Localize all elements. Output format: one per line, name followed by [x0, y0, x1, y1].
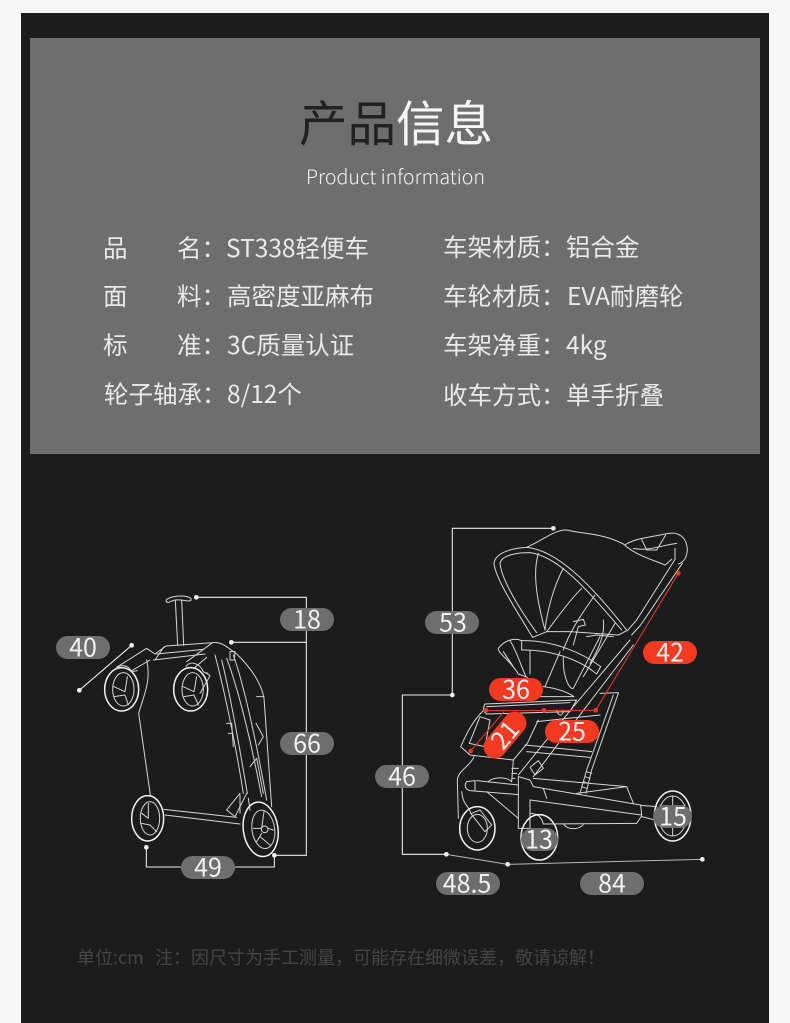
footnote: 单位:cm: [77, 944, 144, 970]
spec: bearings: 轮子轴承：: [104, 376, 226, 411]
label: 15: 15: [659, 798, 687, 834]
label: 66: 66: [293, 724, 321, 760]
icon: folded stroller line art: [105, 596, 282, 859]
subtitle: Product information: [306, 161, 485, 190]
label: 18: [280, 600, 334, 636]
white dimension lines: [402, 526, 705, 867]
spec: fabric: 面: [103, 278, 128, 313]
spec: name: 名：: [177, 230, 226, 265]
label: 21: 21: [482, 712, 527, 757]
label: 84: 84: [598, 864, 626, 900]
spec: folding method: 单手折叠: [566, 377, 664, 412]
spec: fabric: 高密度亚麻布: [227, 278, 374, 313]
spec: wheel material: 车轮材质：: [443, 278, 566, 313]
label: 42: [643, 634, 697, 670]
red dimension lines: [468, 571, 681, 753]
label: 18: 18: [293, 600, 321, 636]
spec: frame material: 车架材质：: [443, 229, 566, 264]
label: 53: 53: [439, 604, 467, 640]
label: 84: [580, 864, 644, 900]
dimension lines: [77, 595, 306, 867]
spec: wheel material: EVA耐磨轮: [567, 278, 684, 313]
label: 49: 49: [194, 848, 222, 884]
spec: standard: 标: [103, 327, 128, 362]
label: 48.5: 48.5: [443, 864, 491, 900]
label: 21: [473, 702, 535, 767]
title: 产品信息: [299, 85, 493, 155]
label: 36: [489, 670, 543, 706]
spec: name: ST338轻便车: [226, 230, 369, 265]
spec: frame weight: 4kg: [566, 327, 607, 362]
spec: frame material: 铝合金: [566, 229, 640, 264]
panel: product information: [30, 38, 760, 454]
label: 40: [56, 628, 110, 664]
spec: standard: 3C质量认证: [227, 327, 354, 362]
label: 25: 25: [558, 712, 586, 748]
label: 36: 36: [502, 670, 530, 706]
icon: open stroller line art: [457, 530, 691, 860]
spec: frame weight: 车架净重：: [443, 327, 566, 362]
label: 49: [181, 848, 235, 884]
label: 53: [425, 604, 479, 640]
spec: standard: 准：: [177, 327, 226, 362]
label: 46: [375, 758, 429, 794]
label: 46: 46: [388, 758, 416, 794]
label: 13: 13: [525, 820, 553, 856]
unfolded stroller diagram: [402, 526, 705, 867]
spec: bearings: 8/12个: [227, 376, 302, 411]
spec: fabric: 料：: [177, 278, 226, 313]
label: 40: 40: [69, 628, 97, 664]
folded stroller diagram: [77, 595, 306, 867]
label: 66: [280, 724, 334, 760]
label: 25: [545, 712, 599, 748]
spec: folding method: 收车方式：: [443, 377, 566, 412]
footnote: 注：因尺寸为手工测量，可能存在细微误差，敬请谅解！: [155, 944, 605, 970]
spec: name: 品: [103, 230, 128, 265]
label: 42: 42: [656, 634, 684, 670]
